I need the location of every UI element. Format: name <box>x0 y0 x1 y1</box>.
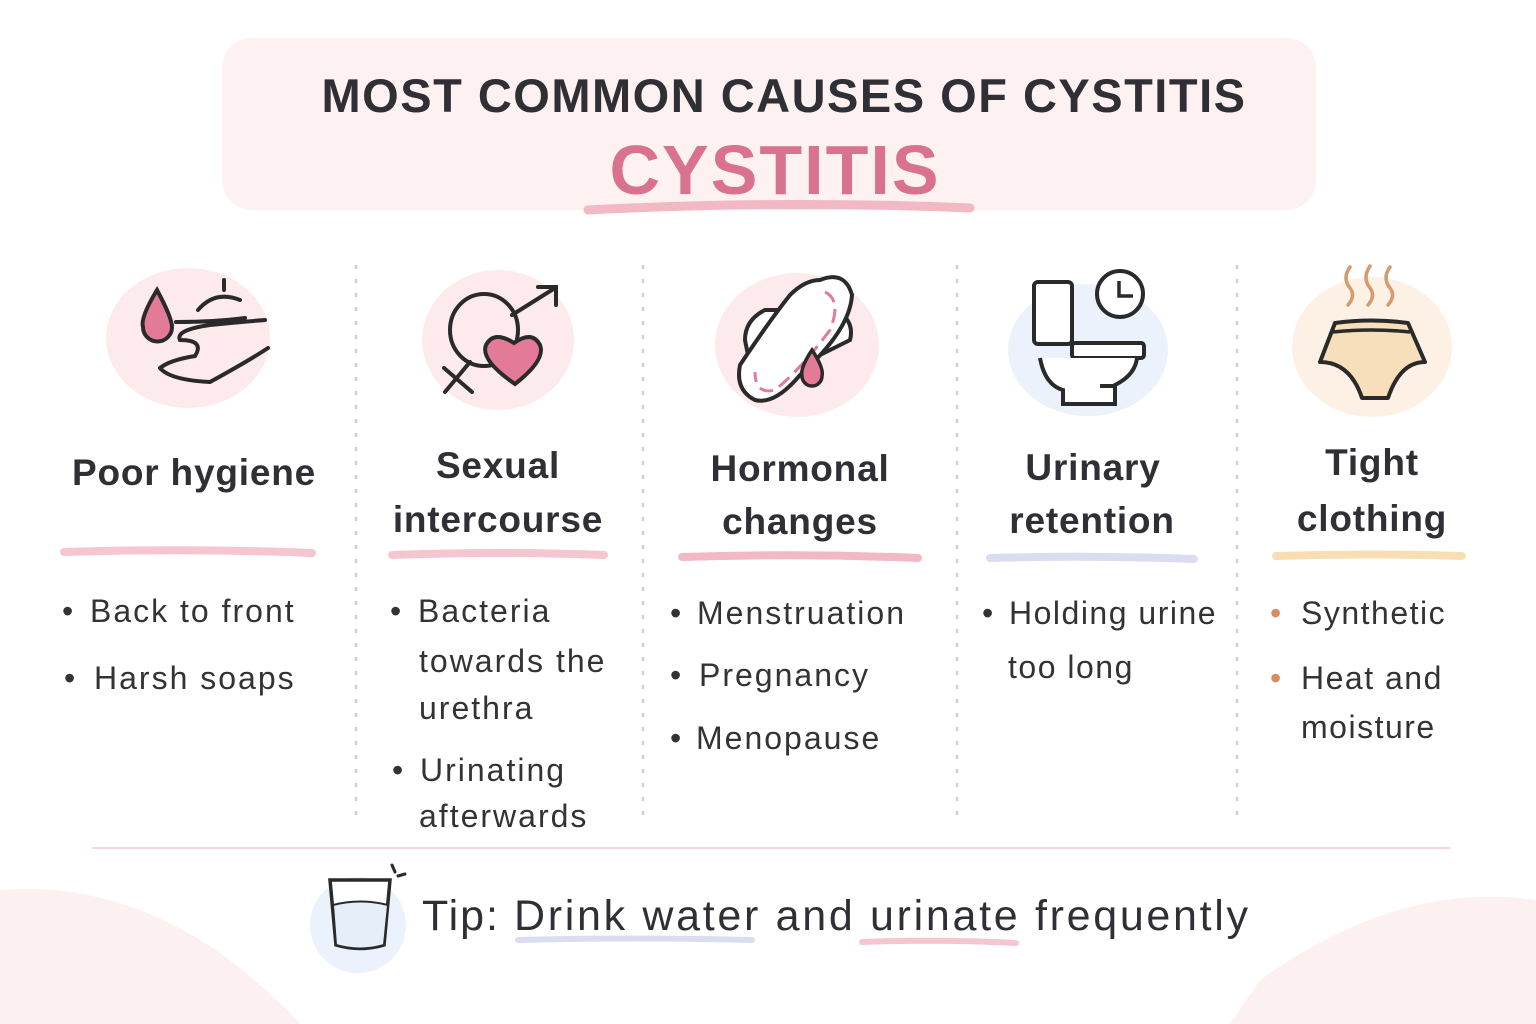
column 2: sexual intercourse: urethra <box>419 690 534 726</box>
column 1: poor hygiene <box>62 452 316 696</box>
column 3: hormonal changes: • <box>670 657 683 693</box>
title: MOST COMMON CAUSES OF CYSTITIS <box>322 69 1246 122</box>
column 5: tight clothing: Heat and <box>1301 660 1443 696</box>
column 2: sexual intercourse: afterwards <box>419 798 588 834</box>
column 4: urinary retention: Urinary <box>1025 447 1161 488</box>
column 2: sexual intercourse: • <box>392 752 405 788</box>
tip text: Tip: <box>422 892 498 940</box>
subtitle: CYSTITIS: CYSTITIS <box>609 131 941 209</box>
column 2: sexual intercourse: intercourse <box>393 499 603 540</box>
column 3: hormonal changes: • <box>670 720 683 756</box>
column 5: tight clothing <box>1270 442 1462 745</box>
column 2: sexual intercourse: Sexual <box>436 445 560 486</box>
column 3: hormonal changes: Hormonal <box>710 448 890 489</box>
icon: toilet with clock <box>1008 271 1168 416</box>
column 5: tight clothing: • <box>1270 595 1283 631</box>
column 3: hormonal changes: changes <box>722 501 878 542</box>
column 3: hormonal changes: Menstruation <box>697 595 906 631</box>
column 1: poor hygiene: Poor hygiene <box>72 452 316 493</box>
column 4: urinary retention: too long <box>1008 649 1134 685</box>
column 2: sexual intercourse <box>390 445 606 834</box>
column 5: tight clothing: Tight <box>1325 442 1419 483</box>
underline brush <box>588 204 970 210</box>
icon: gender symbols with heart <box>422 270 574 410</box>
column 2: sexual intercourse: towards the <box>419 643 606 679</box>
column 4: urinary retention: retention <box>1009 500 1175 541</box>
column 5: tight clothing: clothing <box>1297 498 1447 539</box>
column 4: urinary retention: • <box>982 595 995 631</box>
column 4: urinary retention: Holding urine <box>1009 595 1217 631</box>
column 1: poor hygiene: Back to front <box>90 593 296 629</box>
column 2: sexual intercourse: Urinating <box>420 752 566 788</box>
tip text: Drink water and urinate frequently <box>514 892 1248 940</box>
column 1: poor hygiene: Harsh soaps <box>94 660 296 696</box>
column 1: poor hygiene: • <box>62 593 75 629</box>
icon: underwear with heat <box>1292 266 1452 417</box>
background waves <box>0 889 1536 1024</box>
column 5: tight clothing: moisture <box>1301 709 1436 745</box>
column 5: tight clothing: Synthetic <box>1301 595 1446 631</box>
column 2: sexual intercourse: • <box>390 593 403 629</box>
column 3: hormonal changes <box>670 448 918 756</box>
column 5: tight clothing: • <box>1270 660 1283 696</box>
icon: sanitary pad <box>715 273 879 417</box>
column 2: sexual intercourse: Bacteria <box>418 593 551 629</box>
column 3: hormonal changes: Pregnancy <box>699 657 870 693</box>
icon: glass of water <box>310 865 406 973</box>
icon: hand washing <box>106 268 270 408</box>
header panel <box>222 38 1316 210</box>
column 1: poor hygiene: • <box>64 660 77 696</box>
column 3: hormonal changes: • <box>670 595 683 631</box>
column 4: urinary retention <box>982 447 1217 685</box>
column 3: hormonal changes: Menopause <box>696 720 881 756</box>
